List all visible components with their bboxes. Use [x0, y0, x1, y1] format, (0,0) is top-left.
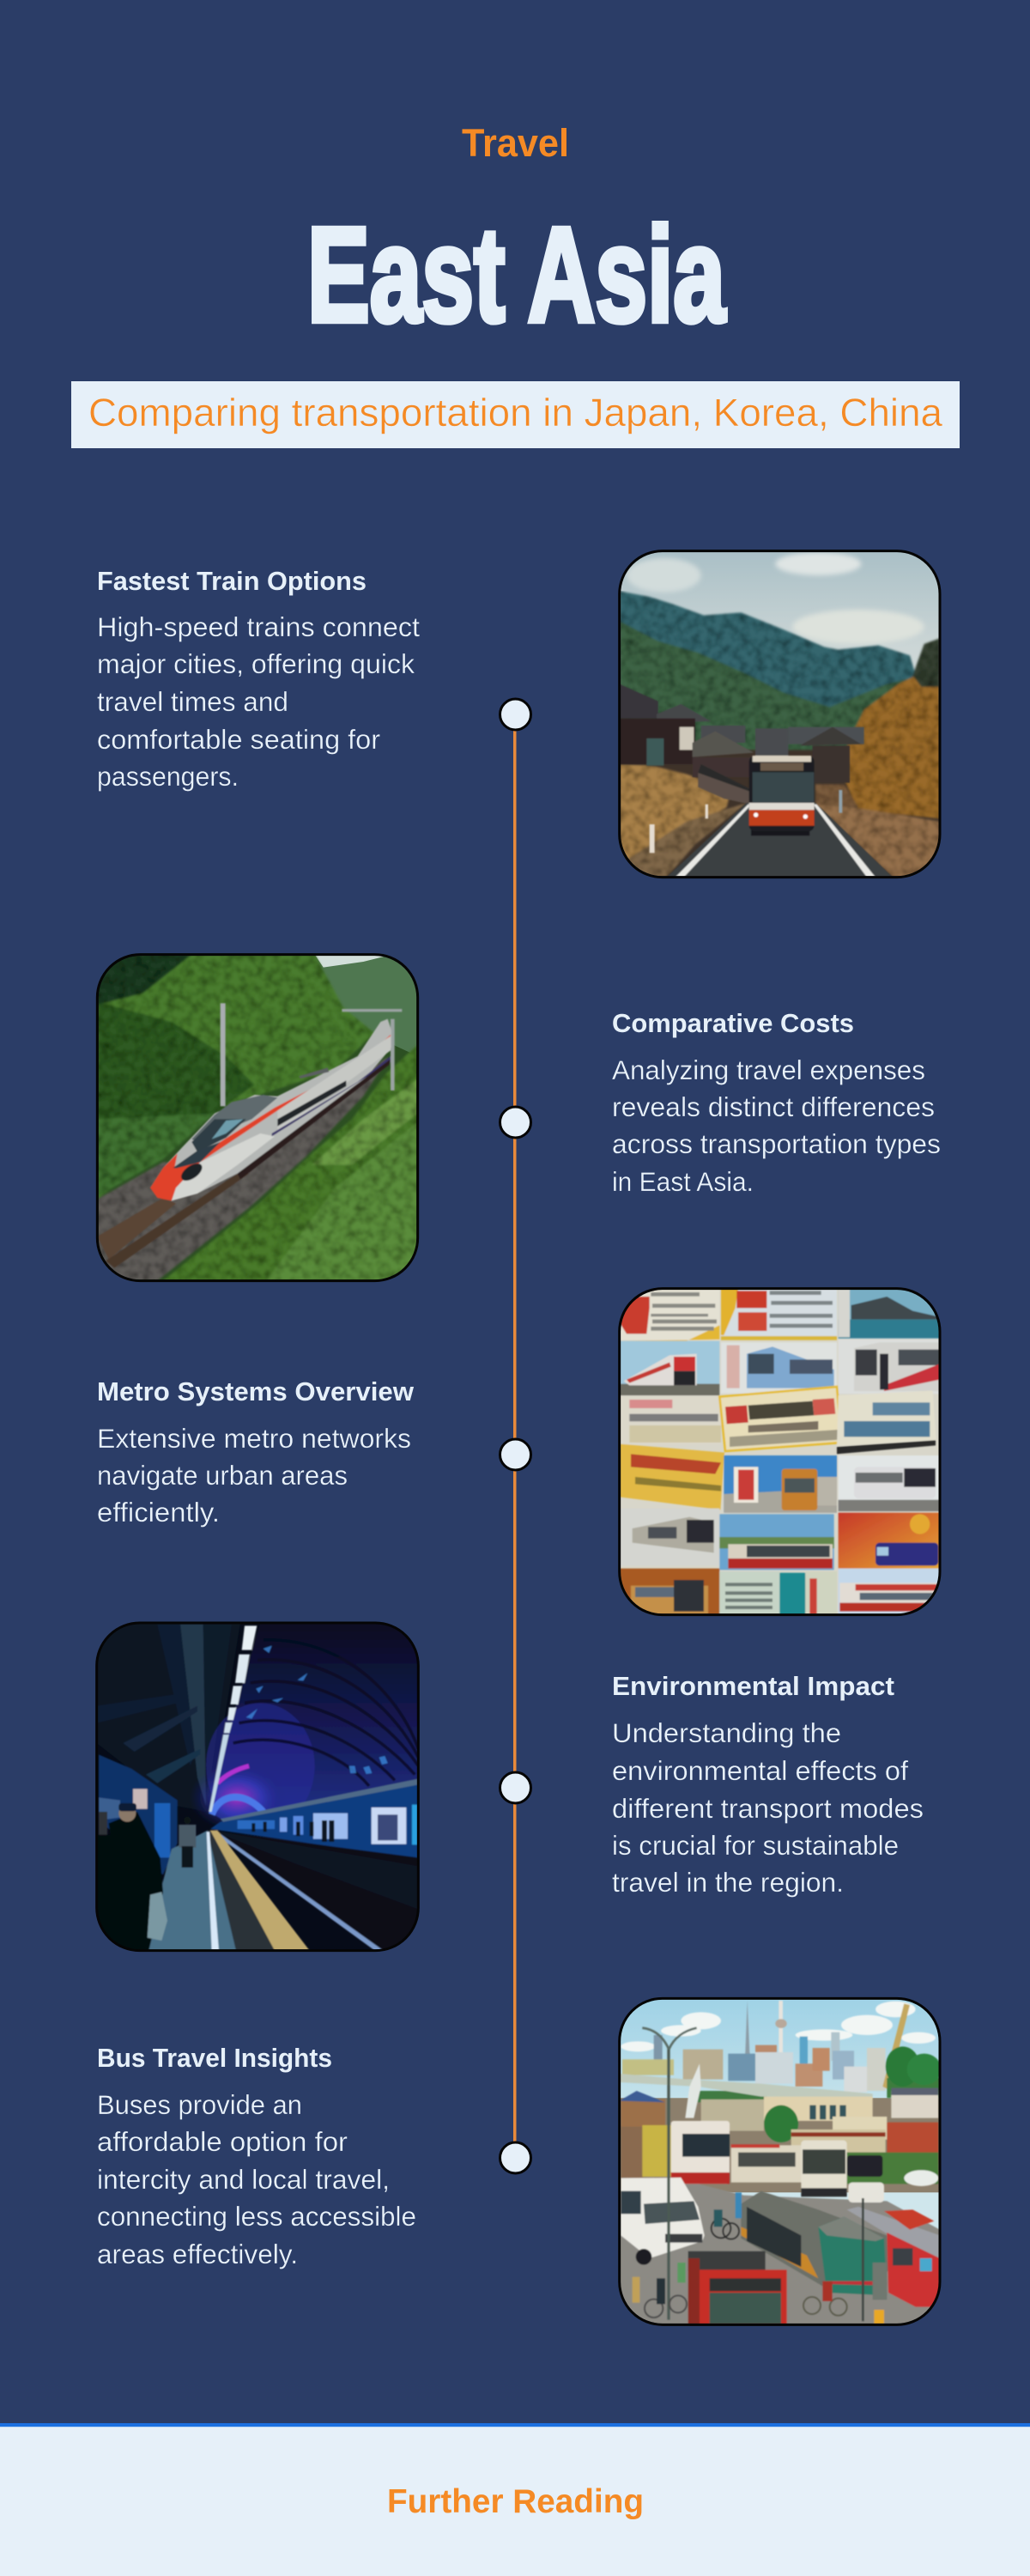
body text: is crucial for sustainable: [612, 1830, 899, 1861]
timeline node: [500, 1772, 530, 1803]
heading: Comparative Costs: [612, 1008, 854, 1038]
body text: major cities, offering quick: [97, 648, 415, 679]
row 4 ticket shapes: [620, 1444, 724, 1510]
category label: Travel: [462, 121, 569, 165]
timeline node: [500, 699, 530, 730]
body text: Analyzing travel expenses: [612, 1054, 925, 1085]
heading: Fastest Train Options: [97, 566, 367, 596]
timeline node: [500, 1439, 530, 1470]
body text: [97, 611, 420, 792]
body text: travel in the region.: [612, 1867, 844, 1898]
body text: connecting less accessible: [97, 2201, 416, 2232]
body text: affordable option for: [97, 2126, 348, 2157]
body text: travel times and: [97, 686, 288, 717]
timeline line: [513, 721, 517, 2155]
body text: [612, 1717, 924, 1898]
body text: Extensive metro networks: [97, 1423, 411, 1454]
photo: collage of rail tickets: [618, 1288, 942, 1617]
panel: fastest train options: [97, 550, 942, 878]
body text: intercity and local travel,: [97, 2164, 390, 2195]
panel: metro systems overview: [97, 1288, 942, 1617]
timeline node: [500, 1107, 530, 1138]
body text: different transport modes: [612, 1793, 924, 1824]
panel: bus travel insights: [97, 1998, 942, 2327]
further reading link: Further Reading: [387, 2483, 644, 2520]
body text: High-speed trains connect: [97, 611, 420, 642]
photo: busy city street with buses and trains: [618, 1998, 942, 2327]
row 3 ticket shapes: [620, 1397, 721, 1444]
header: [71, 121, 960, 448]
body text: navigate urban areas: [97, 1460, 348, 1491]
body text: passengers.: [97, 761, 239, 792]
body text: across transportation types: [612, 1128, 941, 1159]
body text: environmental effects of: [612, 1755, 908, 1786]
body text: reveals distinct differences: [612, 1091, 935, 1122]
body text: [97, 1423, 411, 1528]
row 5 ticket shapes: [620, 1509, 719, 1565]
footer: [0, 2423, 1030, 2576]
body text: [612, 1054, 941, 1197]
body text: areas effectively.: [97, 2239, 298, 2269]
photo: metro station tunnel: [94, 1620, 421, 1952]
row 6 ticket shapes: [620, 1569, 719, 1616]
subtitle banner: [71, 381, 960, 448]
body text: comfortable seating for: [97, 724, 380, 755]
subtitle banner: Comparing transportation in Japan, Korea, China: [88, 391, 943, 434]
title: East Asia: [307, 200, 726, 350]
panel: comparative costs: [94, 953, 941, 1282]
timeline node: [500, 2142, 530, 2173]
photo: bus on a mountain road: [618, 550, 942, 878]
body text: Understanding the: [612, 1717, 841, 1748]
heading: Bus Travel Insights: [97, 2043, 332, 2073]
row 1 ticket shapes: [620, 1289, 719, 1340]
heading: Environmental Impact: [612, 1671, 894, 1701]
body text: efficiently.: [97, 1497, 220, 1528]
row 2 ticket shapes: [620, 1341, 719, 1395]
body text: in East Asia.: [612, 1166, 754, 1197]
photo: high-speed train in green valley: [94, 953, 421, 1282]
body text: Buses provide an: [97, 2089, 302, 2120]
body text: [97, 2089, 416, 2269]
panel: environmental impact: [94, 1620, 924, 1952]
heading: Metro Systems Overview: [97, 1376, 415, 1406]
